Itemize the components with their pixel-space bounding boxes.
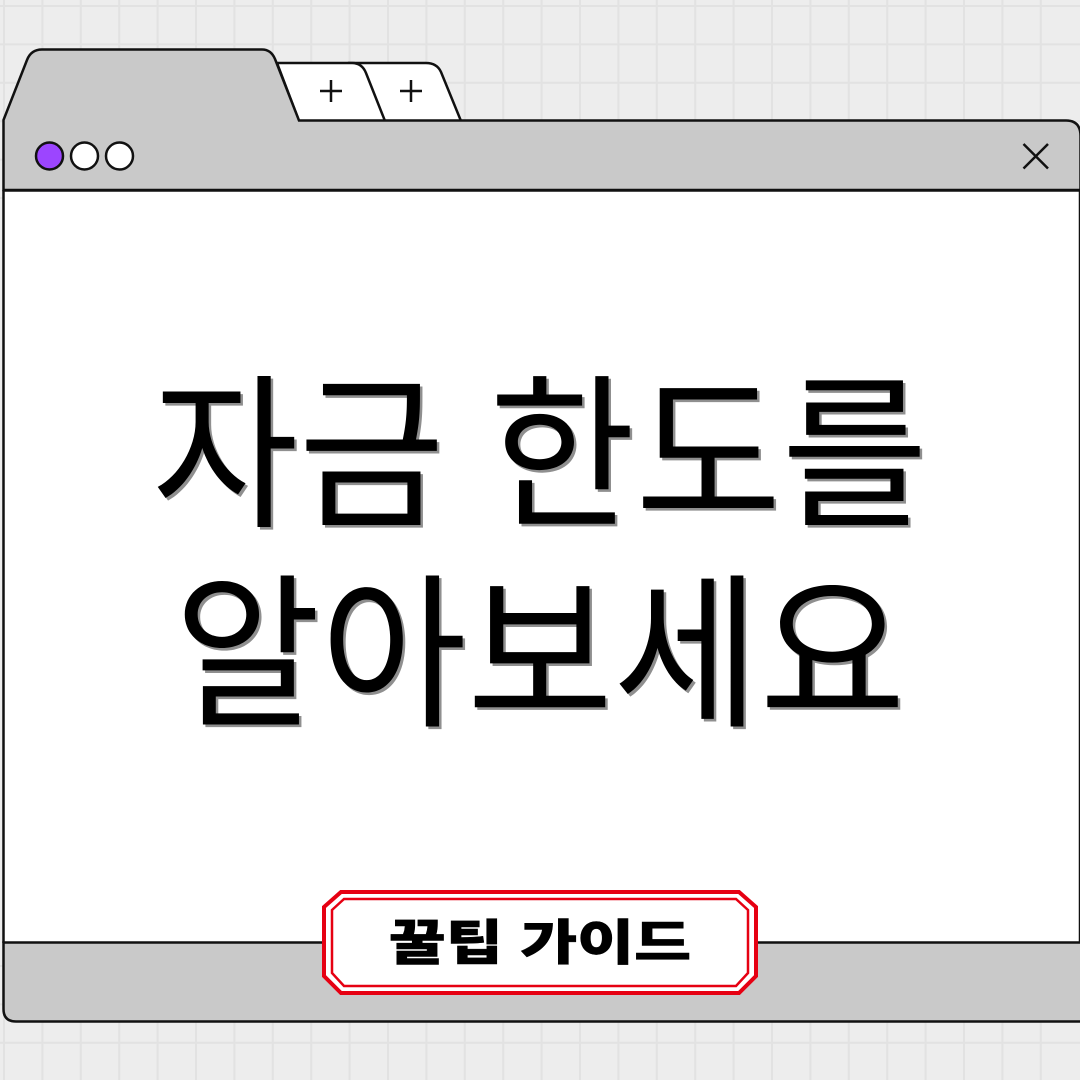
badge frame	[324, 892, 756, 993]
icon: close	[1024, 144, 1048, 168]
window title bar with active tab	[4, 50, 1080, 190]
window control dots	[36, 142, 133, 170]
tab: first plus tab	[277, 63, 385, 121]
badge label: 꿀팁 가이드	[389, 917, 691, 970]
tab: second plus tab	[350, 63, 461, 121]
title: 알아보세요	[174, 562, 906, 749]
title: 자금 한도를	[152, 363, 928, 550]
window body	[4, 191, 1080, 943]
window footer bar	[4, 942, 1080, 1022]
title	[152, 363, 928, 749]
